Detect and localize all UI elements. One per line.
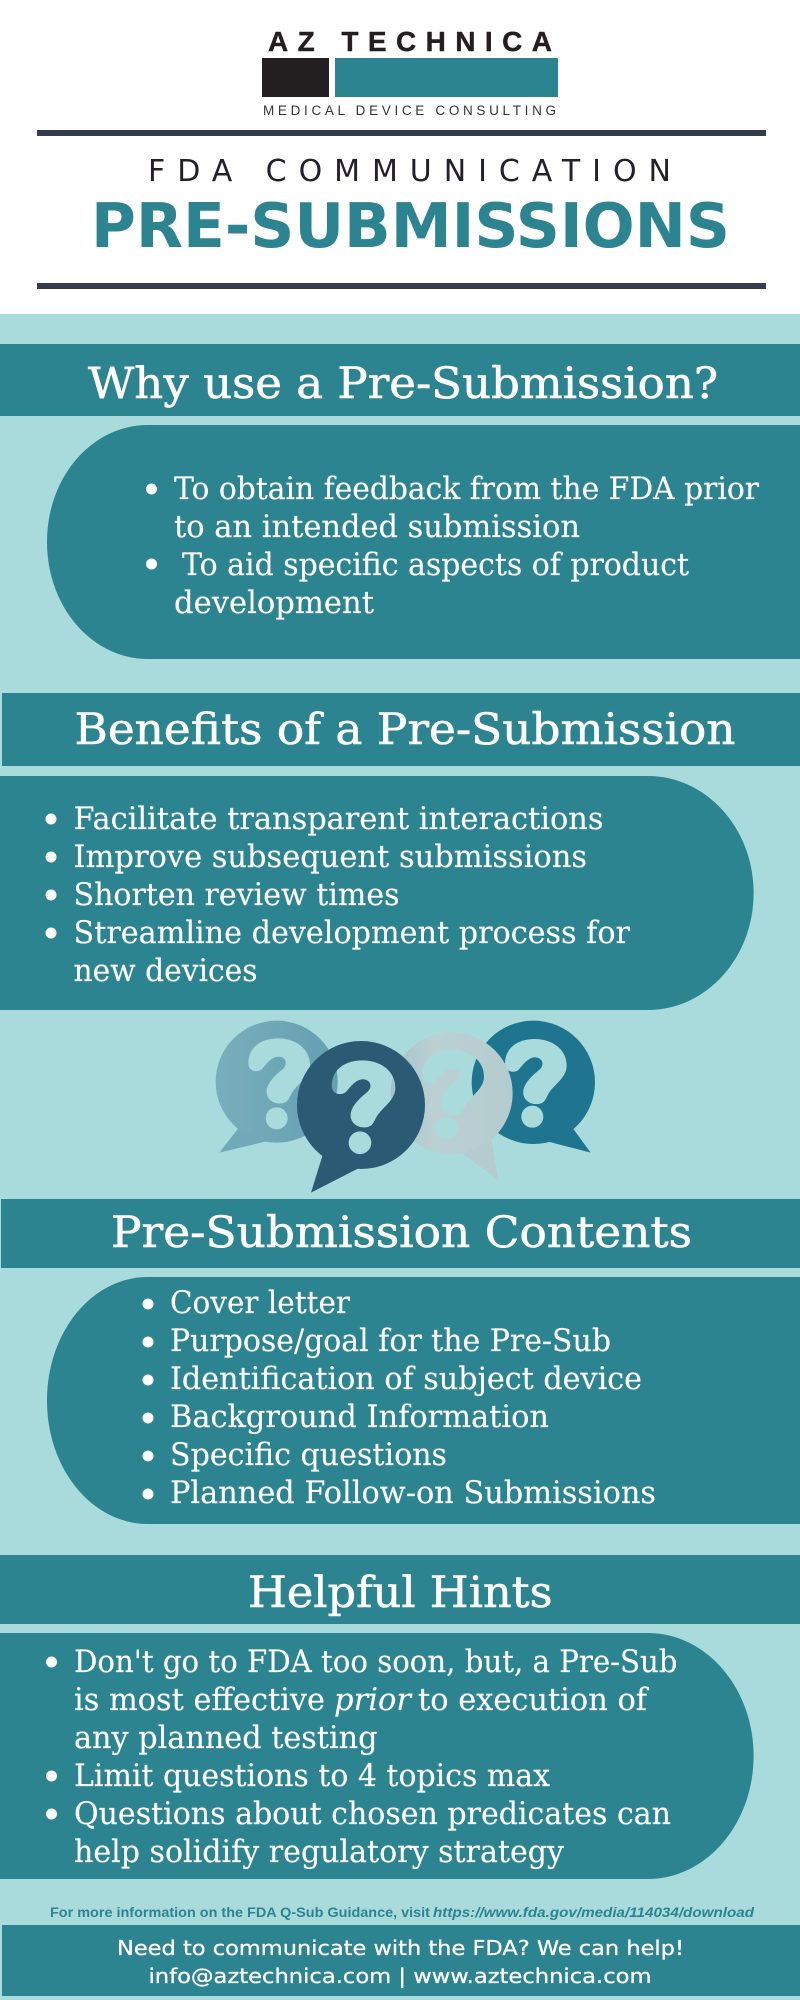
title: FDA Communication: FDA COMMUNICATION [148,154,671,189]
panel: benefits: Facilitate transparent interactions [74,801,604,837]
icon: four question-mark speech bubbles [216,1021,595,1193]
panel: benefits: Improve subsequent submissions [74,839,587,875]
logo: AZ Technica: AZ TECHNICA [268,26,552,57]
panel: helpful hints: to execution of [418,1682,649,1718]
panel: contents: Planned Follow-on Submissions [170,1475,656,1511]
top rule [37,130,766,136]
panel: helpful hints: Limit questions to 4 topics max [74,1758,550,1794]
panel: helpful hints: is most effective [74,1682,325,1718]
panel: why use: To aid specific aspects of product [182,547,690,583]
heading band: Contents [1,1199,800,1268]
heading band: Why use a Pre-Submission: Why use a Pre-Submission? [88,359,718,409]
heading band: Contents: Pre-Submission Contents [111,1208,692,1258]
bubble: light blue [216,1021,338,1153]
heading band: Helpful Hints [0,1555,800,1624]
logo: AZ Technica [262,26,558,118]
heading band: Why use a Pre-Submission [0,344,800,416]
logo: AZ Technica: MEDICAL DEVICE CONSULTING [263,103,556,118]
footnote: guidance link: For more information on the FDA Q-Sub Guidance, visit [50,1905,431,1920]
footer: contact band [2,1925,800,1996]
panel: why use: to an intended submission [174,509,580,545]
heading band: Benefits [2,693,800,766]
panel: contents: Identification of subject device [170,1361,642,1397]
panel: benefits [0,776,754,1010]
bottom rule [37,283,766,289]
panel: why use: To obtain feedback from the FDA prior [174,471,759,507]
footer: contact band: info@aztechnica.com | www.aztechnica.com [148,1964,652,1989]
footnote: guidance link: https://www.fda.gov/media/114034/download [433,1905,755,1920]
bubble: pale grey [391,1032,513,1180]
footer: contact band: Need to communicate with the FDA? We can help! [117,1936,684,1960]
heading band: Benefits: Benefits of a Pre-Submission [74,705,736,755]
panel: benefits: new devices [74,953,258,989]
panel: benefits: Shorten review times [74,877,400,913]
panel: helpful hints: prior [334,1682,413,1718]
heading band: Helpful Hints: Helpful Hints [248,1568,552,1618]
panel: contents [47,1277,800,1524]
panel: why use [47,425,800,659]
title: Pre-Submissions: PRE-SUBMISSIONS [91,190,730,262]
panel: why use: development [174,585,375,621]
panel: helpful hints: Don't go to FDA too soon, but, a Pre-Sub [74,1644,678,1680]
panel: helpful hints: help solidify regulatory strategy [74,1834,564,1870]
bubble: dark navy [297,1041,425,1193]
panel: contents: Cover letter [170,1285,350,1321]
footnote: guidance link [50,1905,755,1920]
panel: benefits: Streamline development process for [74,915,630,951]
panel: helpful hints [0,1633,754,1879]
bubble: teal blue [472,1021,595,1153]
panel: helpful hints: any planned testing [74,1720,378,1756]
panel: helpful hints: Questions about chosen predicates can [74,1796,671,1832]
panel: contents: Background Information [170,1399,549,1435]
panel: contents: Purpose/goal for the Pre-Sub [170,1323,611,1359]
panel: contents: Specific questions [170,1437,447,1473]
